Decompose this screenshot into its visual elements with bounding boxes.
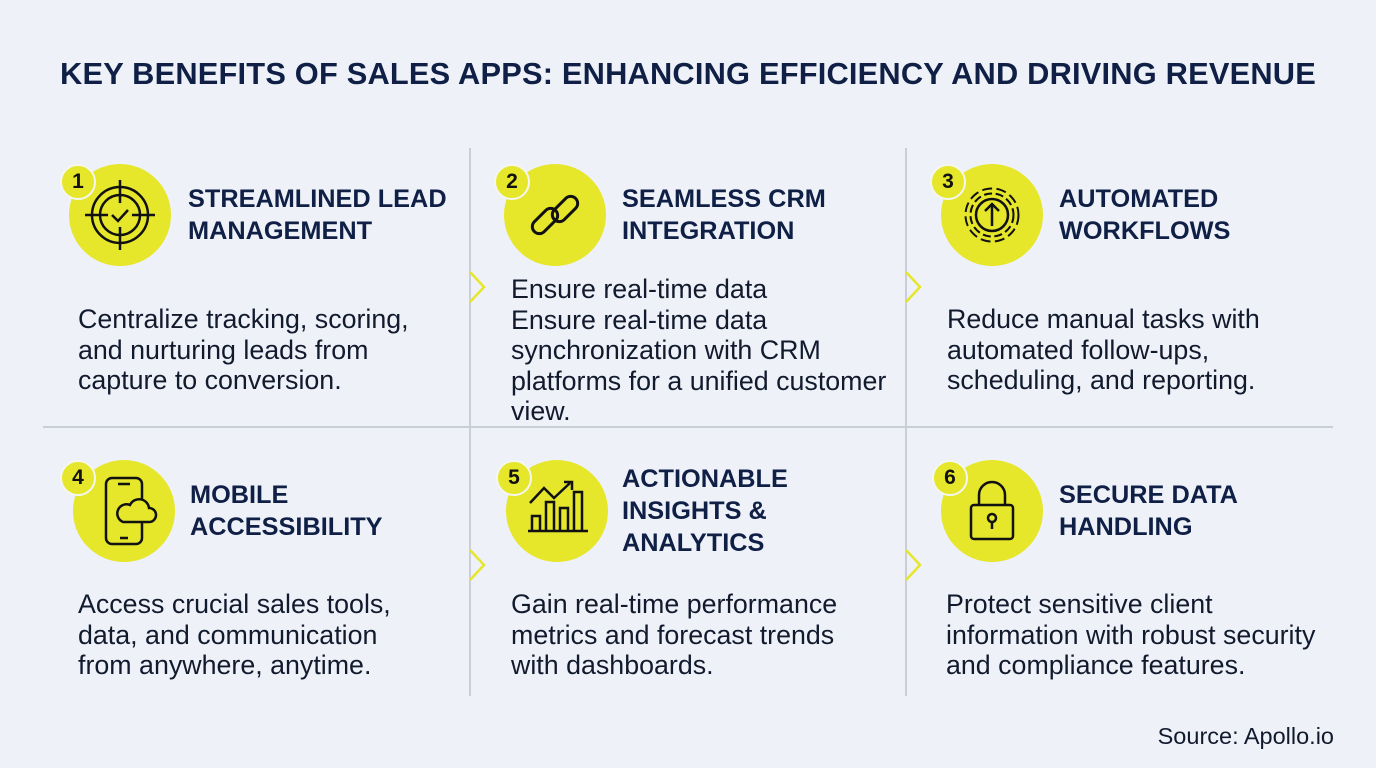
heading: MANAGEMENT (188, 217, 372, 245)
panel 2: INTEGRATION (622, 217, 794, 245)
panel 6: and compliance features. (946, 650, 1245, 680)
panel 4: ACCESSIBILITY (190, 513, 383, 541)
panel 2: Ensure real-time data (511, 304, 767, 334)
panel 2: platforms for a unified customer (511, 366, 886, 396)
panel 5: ANALYTICS (622, 529, 764, 557)
heading (188, 185, 447, 245)
panel 4: from anywhere, anytime. (78, 650, 371, 680)
panel 5: INSIGHTS & (622, 497, 767, 525)
panel 5: metrics and forecast trends (511, 620, 834, 650)
panel 1: 1 (72, 170, 84, 193)
panel 6: Protect sensitive client (946, 589, 1213, 619)
panel 2: view. (511, 396, 571, 426)
panel 3 (932, 164, 1260, 395)
panel 2 (496, 164, 886, 426)
panel 6 (934, 460, 1316, 680)
panel 3: Reduce manual tasks with (947, 304, 1260, 334)
panel 4: 4 (72, 466, 84, 489)
icon: target (69, 164, 171, 266)
text: and nurturing leads from (78, 334, 368, 364)
title: KEY BENEFITS OF SALES APPS: ENHANCING EFFICIENCY AND DRIVING REVENUE (60, 56, 1316, 91)
text: capture to conversion. (78, 365, 342, 395)
panel 3: automated follow-ups, (947, 334, 1209, 364)
panel 5: 5 (508, 466, 520, 489)
panel 5 (498, 460, 837, 680)
panel 4: MOBILE (190, 481, 288, 509)
panel 6: SECURE DATA (1059, 481, 1238, 509)
heading: STREAMLINED LEAD (188, 185, 447, 213)
panel 6: HANDLING (1059, 513, 1193, 541)
panel 2: Ensure real-time data (511, 274, 767, 304)
panel 3: WORKFLOWS (1059, 217, 1230, 245)
panel 1 (62, 164, 447, 395)
source: Source: Apollo.io (1158, 723, 1334, 749)
panel 4: data, and communication (78, 620, 377, 650)
panel 5: Gain real-time performance (511, 589, 837, 619)
text (78, 304, 409, 395)
panel 6: information with robust security (946, 620, 1315, 650)
panel 2: synchronization with CRM (511, 335, 821, 365)
panel 5: with dashboards. (511, 650, 714, 680)
panel 3: AUTOMATED (1059, 185, 1218, 213)
text: Centralize tracking, scoring, (78, 304, 409, 334)
panel 4 (62, 460, 391, 680)
panel 6: 6 (944, 466, 956, 489)
panel 3: scheduling, and reporting. (947, 365, 1255, 395)
panel 4: Access crucial sales tools, (78, 589, 391, 619)
panel 2: 2 (506, 170, 518, 193)
panel 3: 3 (942, 170, 954, 193)
panel 2: SEAMLESS CRM (622, 185, 826, 213)
panel 5: ACTIONABLE (622, 465, 788, 493)
